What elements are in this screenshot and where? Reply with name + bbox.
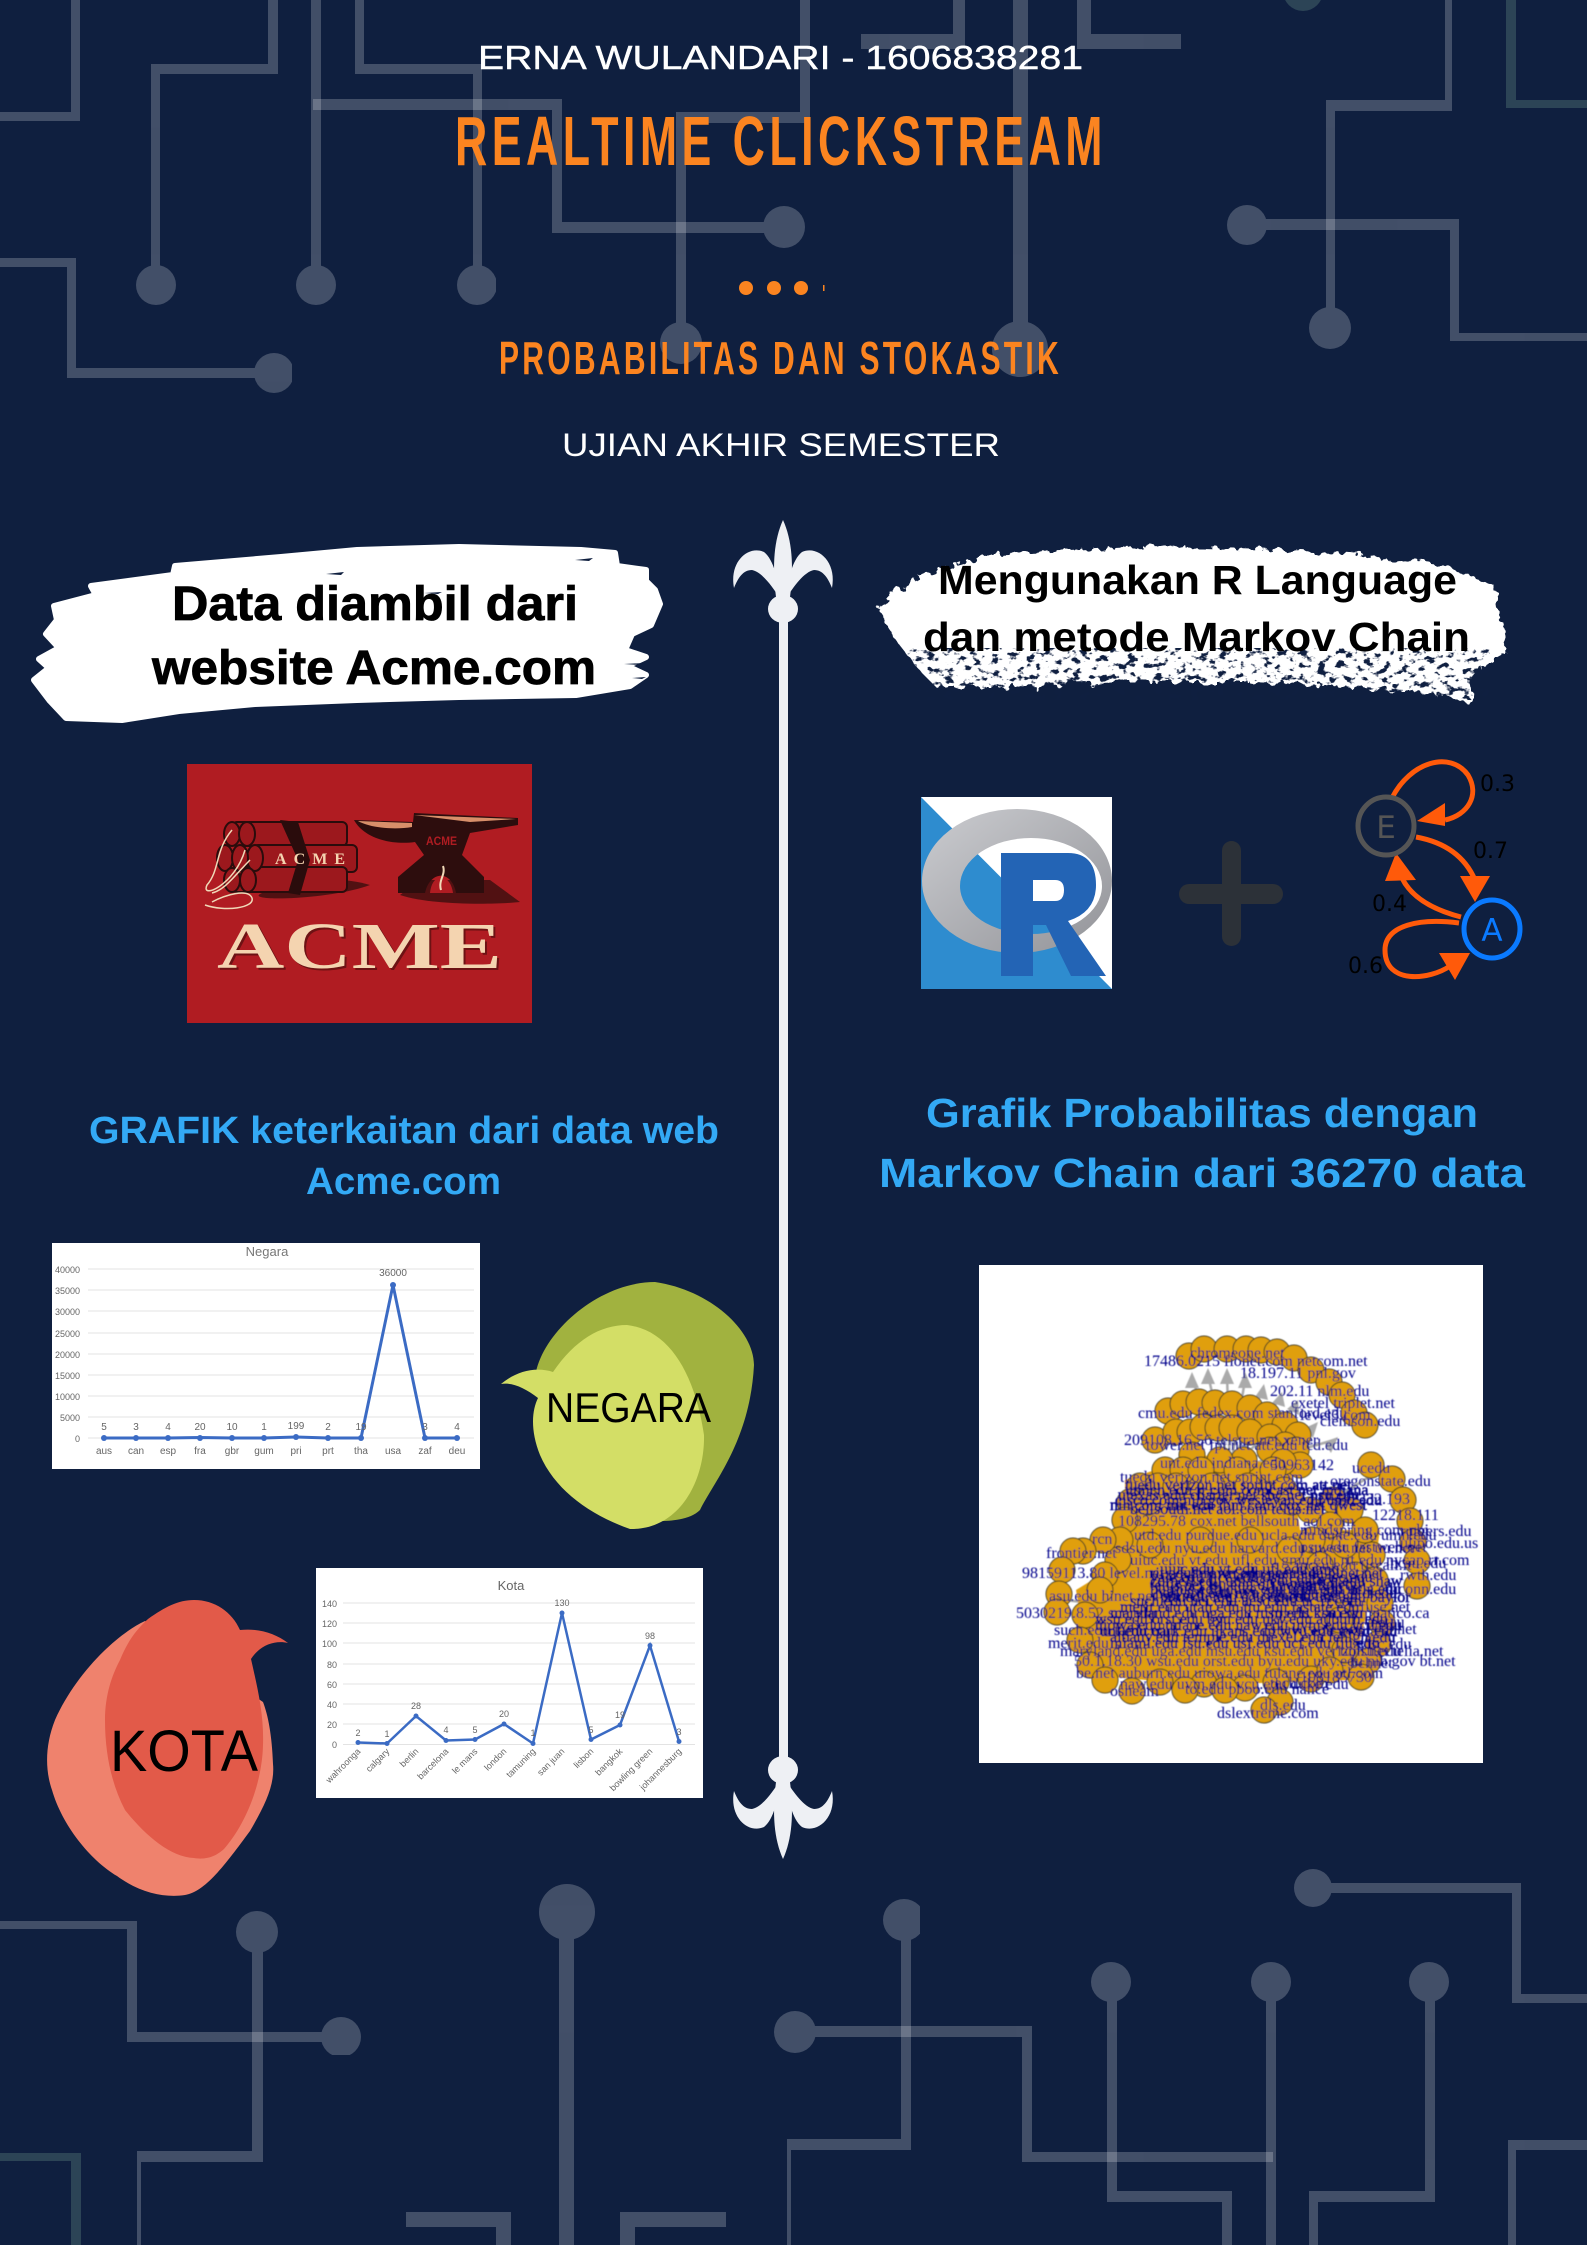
graph node labels: 108185730 bbox=[1300, 1669, 1372, 1686]
banner text: Mengunakan R Language bbox=[938, 557, 1457, 603]
graph node labels: cmu.edu fedex.com stanford.edu bbox=[1138, 1405, 1347, 1422]
line chart: Kota: 140 bbox=[322, 1599, 337, 1609]
line chart: Negara: 40000 bbox=[55, 1265, 80, 1275]
line chart: Negara: 5000 bbox=[60, 1413, 80, 1423]
banner text bbox=[923, 557, 1470, 660]
dense centre of graph: such.edu uci.edu ucsd.edu nc.rr.com bbox=[1130, 1593, 1362, 1610]
graph node labels: rcn bbox=[1092, 1531, 1112, 1548]
graph node labels: to.edu pboo.edu nance bbox=[1185, 1681, 1329, 1698]
line chart: Kota: 60 bbox=[327, 1680, 337, 1690]
graph node labels: ncsu.edu bbox=[1390, 1555, 1446, 1572]
ACME wordmark bbox=[217, 910, 504, 985]
line chart: Negara: 20 bbox=[194, 1422, 206, 1433]
dense centre of graph: tuedu verizon.net sprint.com att.net bbox=[1125, 1477, 1352, 1494]
heading: right chart section: Markov Chain dari 36270 data bbox=[879, 1150, 1526, 1196]
line chart: Kota: 130 bbox=[554, 1598, 570, 1608]
line chart: Kota bbox=[316, 1568, 703, 1798]
graph node labels: tower.net fpt.net att.edu tcd.edu bbox=[1146, 1437, 1348, 1454]
line chart: Negara: 199 bbox=[288, 1421, 305, 1432]
heading: right chart section: Grafik Probabilitas dengan bbox=[926, 1090, 1478, 1136]
line chart: Kota: wahroonga bbox=[323, 1746, 362, 1786]
graph node labels: asu.edu hinet.net cornell.edu bbox=[1049, 1588, 1232, 1605]
line chart: Negara: 35000 bbox=[55, 1286, 80, 1296]
icon: dynamite: ACME bbox=[275, 851, 345, 868]
icon: dynamite bbox=[205, 820, 370, 909]
line chart: Negara: usa bbox=[385, 1446, 401, 1457]
banner text: website Acme.com bbox=[151, 642, 596, 695]
dense centre of graph: bellsouth.net aol.com telus.net bbox=[1130, 1501, 1326, 1518]
subtitle: PROBABILITAS DAN STOKASTIK bbox=[499, 332, 1062, 384]
dense centre of graph: unl.edu uark.edu ukans.edu wvu.edu uwm.edu bbox=[1100, 1623, 1397, 1640]
dense centre of graph: cornell.edu umass.edu gatech.edu shaw bbox=[1150, 1573, 1403, 1590]
graph node labels: 98159113.80 level.net pacbell.net ameritech.net bbox=[1022, 1565, 1329, 1582]
line chart: Kota: barcelona bbox=[415, 1746, 450, 1781]
graph node labels: ulipo.edu.us bbox=[1400, 1535, 1478, 1552]
line chart: Negara: 0 bbox=[75, 1434, 80, 1444]
dots divider bbox=[739, 281, 824, 295]
graph node labels: 50.1.18.30 wsu.edu orst.edu byu.edu uky.edu nih.gov bt.net bbox=[1074, 1653, 1456, 1670]
line chart: Kota: 120 bbox=[322, 1619, 337, 1629]
dense centre of graph bbox=[1095, 1477, 1411, 1652]
dense centre of graph: yale.edu rice.edu osu.edu wisc.edu bbox=[1150, 1569, 1373, 1586]
line chart: Negara: deu bbox=[449, 1446, 465, 1457]
line chart: Kota: 1 bbox=[384, 1729, 390, 1739]
graph node labels: wisc.edu bbox=[1355, 1636, 1411, 1653]
graph node labels: osheam bbox=[1110, 1683, 1159, 1700]
line chart: Negara: esp bbox=[160, 1446, 176, 1457]
banner text: dan metode Markov Chain bbox=[923, 614, 1470, 660]
graph node labels: ucedu bbox=[1352, 1460, 1390, 1477]
graph node labels: tuedu verizon.net sprint.com bbox=[1120, 1469, 1304, 1486]
line chart: Kota: tamuning bbox=[504, 1746, 537, 1780]
dense centre of graph: uiuc.edu vt.edu ufl.edu gmu bbox=[1160, 1561, 1340, 1578]
dense centre of graph: merit.edu utah.edu ttu.edu iastate.edu bbox=[1120, 1599, 1359, 1616]
markov chain diagram: E bbox=[1376, 810, 1396, 846]
dense centre of graph: uiowa.edu tulane.edu naw.edu uvm.edu vcu.edu bbox=[1095, 1617, 1402, 1634]
line chart: Negara: 30000 bbox=[55, 1307, 80, 1317]
line chart: Negara: pri bbox=[290, 1446, 302, 1457]
line chart: Negara: Negara bbox=[246, 1244, 289, 1259]
heading: left chart section bbox=[89, 1110, 719, 1203]
line chart: Negara: 25000 bbox=[55, 1329, 80, 1339]
graph node labels: rogers.com sympatico.ca bbox=[1270, 1605, 1430, 1622]
dense centre of graph: nih.com mit.edu ibm.com cox.net qwest bbox=[1110, 1497, 1367, 1514]
graph node labels: 18.197.11 pnl.gov bbox=[1240, 1365, 1356, 1382]
graph node labels: utd.edu purdue.edu ucla.edu duke.edu umn.edu bbox=[1134, 1527, 1437, 1544]
line chart: Negara: 15000 bbox=[55, 1371, 80, 1381]
line chart: Negara: 10000 bbox=[55, 1392, 80, 1402]
line chart: Kota: bowling green bbox=[608, 1746, 654, 1793]
line chart: Negara: gum bbox=[254, 1446, 274, 1457]
graph node labels: frontier.net bbox=[1046, 1545, 1117, 1562]
line chart: Kota: 5 bbox=[588, 1725, 594, 1735]
graph node labels: dslextreme.com bbox=[1217, 1705, 1319, 1722]
dense centre of graph: telus.net lsu.edu dll.net tamu.edu bbox=[1150, 1577, 1361, 1594]
graph node labels: 202.11 nlm.edu bbox=[1270, 1383, 1369, 1400]
line chart: Kota: 20 bbox=[499, 1709, 509, 1719]
dense centre of graph: purdue.edu duke.edu umn.edu ucla.edu bbox=[1150, 1581, 1401, 1598]
graph node labels: 5030219.8.52 scn.edu bbox=[1016, 1605, 1156, 1622]
graph node labels: chromeone.net bbox=[1190, 1345, 1285, 1362]
markov chain diagram: 0.7 bbox=[1473, 839, 1508, 864]
circuit pattern: top bbox=[0, 0, 1587, 393]
heading: left chart section: GRAFIK keterkaitan dari data web bbox=[89, 1110, 719, 1152]
left brush banner bbox=[34, 547, 660, 720]
dense centre of graph: umich.edu rr.com comcast.net indiana bbox=[1125, 1482, 1368, 1499]
graph node labels: umsu.edu bbox=[1340, 1643, 1402, 1660]
dense centre of graph: pitt.edu mtu.edu ou.edu unc.edu baylor bbox=[1160, 1589, 1411, 1606]
graph node labels: be.net auburn.edu uiowa.edu tulane.edu ntl.com bbox=[1076, 1665, 1384, 1682]
ACME wordmark: ACME bbox=[217, 910, 502, 983]
dense centre of graph: albany.edu temple.edu drexel.edu lehigh.edu bbox=[1110, 1629, 1396, 1646]
line chart: Negara bbox=[52, 1243, 480, 1469]
markov chain diagram: A bbox=[1481, 913, 1503, 949]
center divider with fleur ornaments bbox=[733, 520, 833, 1859]
graph node labels: ocl.cpr.net bbox=[1350, 1621, 1417, 1638]
graph node labels: fuse.net bbox=[1360, 1599, 1411, 1616]
line chart: Negara: can bbox=[128, 1446, 144, 1457]
graph node labels: dls.edu bbox=[1260, 1697, 1306, 1714]
line chart: Negara: 19 bbox=[355, 1422, 367, 1433]
dense centre of graph: harvard.edu nyu.edu sdsu.edu utd.edu bbox=[1155, 1585, 1397, 1602]
heading: right chart section bbox=[879, 1090, 1526, 1196]
graph node labels: 108295.78 cox.net bellsouth aol.com bbox=[1118, 1513, 1355, 1530]
line chart: Kota: bangkok bbox=[593, 1746, 625, 1777]
line chart: Negara: 20000 bbox=[55, 1350, 80, 1360]
markov chain diagram: 0.6 bbox=[1348, 954, 1383, 979]
line chart: Kota: 98 bbox=[645, 1631, 655, 1641]
line chart: Kota: calgary bbox=[364, 1746, 392, 1774]
banner text bbox=[151, 578, 596, 695]
line chart: Negara: fra bbox=[194, 1446, 206, 1457]
icon: anvil bbox=[354, 813, 520, 904]
graph node labels: 50442232.193 bbox=[1318, 1491, 1410, 1508]
graph node labels: such.edu tamu.edu bbox=[1054, 1622, 1174, 1639]
graph node labels: uconn.edu bbox=[1390, 1581, 1456, 1598]
dense centre of graph: cisco.com nih.gov wesleyan.edu umd.edu bbox=[1115, 1492, 1382, 1509]
graph node labels: ncsu.edu tiscali.it bbox=[1300, 1557, 1412, 1574]
line chart: Kota: san juan bbox=[535, 1746, 566, 1777]
markov chain diagram: 0.4 bbox=[1372, 892, 1407, 917]
graph edges and arrows bbox=[1065, 1368, 1380, 1610]
dense centre of graph: utexas.edu charter.net sbc.net psu.edu bbox=[1118, 1487, 1359, 1504]
speech blob: Kota bbox=[47, 1600, 288, 1896]
line chart: Negara: 5 bbox=[101, 1422, 107, 1433]
speech blob: Negara bbox=[501, 1282, 754, 1529]
graph node labels: earthlink.com bbox=[1270, 1587, 1359, 1604]
graph node labels: rutgers.edu bbox=[1400, 1523, 1472, 1540]
network graph: markov chain probability bbox=[979, 1265, 1483, 1763]
line chart: Negara: 10 bbox=[226, 1422, 238, 1433]
dense centre of graph: rit.edu brown.edu ncsu.edu hinet.net bbox=[1150, 1565, 1384, 1582]
line chart: Negara: aus bbox=[96, 1446, 112, 1457]
line chart: Negara: 2 bbox=[325, 1422, 331, 1433]
line chart: Kota: 20 bbox=[327, 1720, 337, 1730]
graph node labels: mindspring.com pbi bbox=[1300, 1522, 1429, 1539]
line chart: Kota: 28 bbox=[411, 1701, 421, 1711]
line chart: Kota: johannesburg bbox=[637, 1746, 683, 1793]
author line: ERNA WULANDARI - 1606838281 bbox=[478, 39, 1083, 76]
graph node labels: oregonstate.edu bbox=[1330, 1473, 1431, 1490]
graph node labels: 50963142 bbox=[1270, 1457, 1334, 1474]
graph node labels: shawcable net bbox=[1270, 1621, 1361, 1638]
speech blob: Kota: KOTA bbox=[110, 1719, 258, 1784]
graph nodes bbox=[1044, 1336, 1430, 1723]
line chart: Negara: tha bbox=[354, 1446, 368, 1457]
line chart: Kota: 80 bbox=[327, 1660, 337, 1670]
heading: left chart section: Acme.com bbox=[306, 1161, 501, 1203]
line chart: Negara: 36000 bbox=[379, 1268, 407, 1279]
graph node labels: 17486.0215 fionet.com netcom.net bbox=[1144, 1353, 1368, 1370]
line chart: Kota: 1 bbox=[530, 1728, 536, 1738]
line chart: Negara: 4 bbox=[165, 1422, 171, 1433]
graph node labels: tech.com bbox=[1270, 1675, 1329, 1692]
graph node labels: maryland.edu uga.edu msu.edu ksu.edu verizon.net telia.net bbox=[1060, 1643, 1444, 1660]
icon: plus sign bbox=[1179, 841, 1283, 946]
circuit pattern: bottom bbox=[0, 1869, 1587, 2245]
line chart: Negara: 4 bbox=[454, 1422, 460, 1433]
line chart: Kota: 0 bbox=[332, 1740, 337, 1750]
line chart: Kota: 2 bbox=[355, 1728, 361, 1738]
markov chain diagram bbox=[1348, 762, 1520, 980]
ACME logo bbox=[187, 764, 532, 1023]
icon: anvil: ACME bbox=[426, 834, 457, 848]
graph node labels: exetel triplet.net bbox=[1291, 1395, 1396, 1412]
line chart: Kota: london bbox=[482, 1746, 508, 1773]
graph node labels: 209108.16.56 telstra.net xener bbox=[1124, 1432, 1319, 1449]
banner text: Data diambil dari bbox=[172, 578, 578, 631]
line chart: Kota: lisbon bbox=[572, 1746, 595, 1770]
dense centre of graph: wsu.edu orst.edu byu.edu uky.edu auburn.edu bbox=[1095, 1611, 1388, 1628]
ACME wordmark: ACME bbox=[219, 912, 504, 985]
line chart: Negara: 3 bbox=[133, 1422, 139, 1433]
graph node labels: clemson.edu bbox=[1320, 1413, 1400, 1430]
line chart: Negara: gbr bbox=[225, 1446, 240, 1457]
graph node labels: naw.edu uvm.edu vcu.edu duke.edu bbox=[1120, 1676, 1349, 1693]
graph node labels: uiuc.edu vt.edu ufl.edu gmu.edu rit.edu nycap.rr.com bbox=[1130, 1552, 1470, 1569]
markov chain diagram: 0.3 bbox=[1480, 772, 1515, 797]
line chart: Kota: le mans bbox=[450, 1746, 480, 1776]
graph node labels: sdsu.edu nyu.edu harvard.edu qwest.net uu.net bbox=[1115, 1540, 1415, 1557]
graph node labels: merit.edu bbox=[1048, 1635, 1109, 1652]
line chart: Kota: 5 bbox=[472, 1725, 478, 1735]
graph node labels: bchnet bbox=[1350, 1655, 1393, 1672]
line chart: Negara: prt bbox=[322, 1446, 334, 1457]
line chart: Negara: 1 bbox=[261, 1422, 267, 1433]
line chart: Kota: berlin bbox=[398, 1746, 420, 1769]
dense centre of graph: miami.edu fsu.edu usf.edu ucf.edu fiu.edu bbox=[1110, 1635, 1380, 1652]
graph node labels: level3.com bbox=[1300, 1407, 1371, 1424]
line chart: Negara: zaf bbox=[418, 1446, 432, 1457]
graph node labels: psu.edu fastweb.net bbox=[1300, 1539, 1427, 1556]
line chart: Kota: 19 bbox=[615, 1710, 625, 1720]
R language logo bbox=[921, 797, 1112, 989]
graph node labels: 12218.111 bbox=[1372, 1507, 1439, 1524]
dense centre of graph: maryland.edu uga.edu msu.edu ksu.edu bbox=[1110, 1605, 1363, 1622]
graph node labels bbox=[1016, 1345, 1478, 1722]
line chart: Negara: 3 bbox=[422, 1422, 428, 1433]
graph node labels: panix.net bbox=[1290, 1575, 1350, 1592]
line chart: Kota: 40 bbox=[327, 1700, 337, 1710]
line chart: Kota: Kota bbox=[498, 1578, 525, 1593]
graph node labels: unt.edu indiana.edu bbox=[1160, 1455, 1286, 1472]
graph node labels: netau bbox=[1370, 1614, 1405, 1631]
line chart: Kota: 3 bbox=[676, 1727, 682, 1737]
graph node labels: rwth.edu bbox=[1400, 1567, 1456, 1584]
main title: REALTIME CLICKSTREAM bbox=[455, 102, 1107, 180]
line chart: Kota: 4 bbox=[443, 1725, 449, 1735]
right brush banner bbox=[878, 546, 1508, 705]
speech blob: Negara: NEGARA bbox=[546, 1384, 711, 1431]
exam label: UJIAN AKHIR SEMESTER bbox=[562, 427, 1000, 463]
line chart: Kota: 100 bbox=[322, 1639, 337, 1649]
